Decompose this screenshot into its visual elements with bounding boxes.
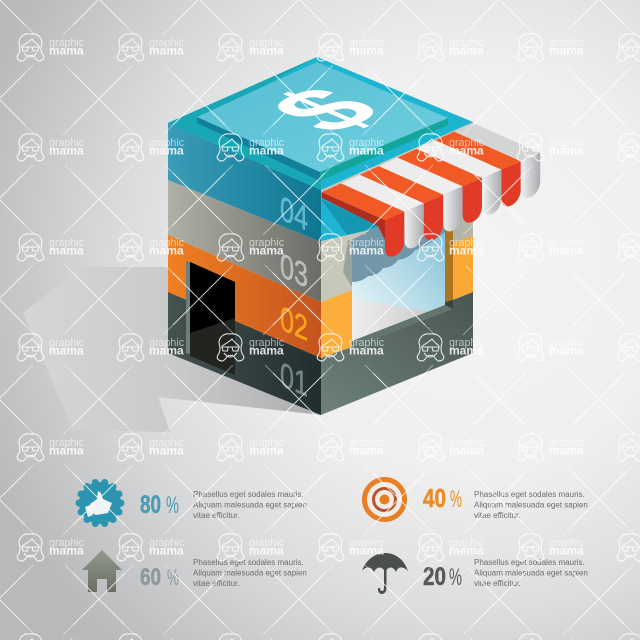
text block: Phasellus eget sodales mauris.	[193, 490, 304, 499]
value: 80 %: %	[166, 492, 179, 519]
text block: Phasellus eget sodales mauris.	[474, 490, 585, 499]
striped awning	[322, 123, 540, 257]
stat: 60 percent	[82, 550, 307, 592]
value: 40 %: %	[450, 486, 462, 513]
text block: vitae efficitur.	[474, 511, 521, 520]
cyan wall under awning	[321, 192, 390, 241]
text block: Aliquam malesuada eget sapien	[193, 568, 307, 578]
awning shadow on the wall	[343, 240, 352, 287]
roof slab	[168, 57, 473, 190]
text block: Aliquam malesuada eget sapien	[474, 568, 588, 578]
number 04: 04	[280, 188, 308, 239]
text block: Phasellus eget sodales mauris.	[474, 558, 585, 567]
value: 20 %: %	[449, 564, 462, 591]
stat: 40 percent	[364, 480, 588, 520]
icon: house	[82, 550, 122, 592]
storey numbers	[280, 188, 308, 405]
stat: 20 percent	[362, 553, 588, 594]
number 01: 01	[280, 354, 308, 405]
number 03: 03	[280, 245, 308, 296]
door	[186, 261, 235, 375]
shop window	[352, 222, 445, 341]
dollar sign: $	[242, 75, 408, 145]
right wall	[321, 122, 473, 415]
number 02: 02	[280, 298, 308, 349]
left wall bands	[168, 123, 321, 415]
icon: thumbs-up badge	[76, 479, 124, 527]
value: 80 %: 80	[140, 491, 161, 519]
text block: Phasellus eget sodales mauris.	[193, 558, 304, 567]
cast shadow of the shop	[23, 267, 321, 432]
value: 40 %: 40	[423, 483, 446, 513]
stat: 80 percent	[76, 479, 307, 527]
text block: vitae efficitur.	[193, 579, 240, 588]
icon: target	[364, 480, 404, 520]
value: 60 %	[140, 564, 179, 591]
lower wall	[321, 292, 473, 415]
text block: vitae efficitur.	[193, 511, 240, 520]
text block: Aliquam malesuada eget sapien	[193, 500, 307, 510]
text block: vitae efficitur.	[474, 579, 521, 588]
isometric shop building	[168, 57, 540, 415]
value: 60 %: 60	[140, 564, 161, 591]
value: 20 %: 20	[423, 563, 446, 591]
text block: Aliquam malesuada eget sapien	[474, 500, 588, 510]
value: 60 %: %	[167, 564, 179, 590]
icon: umbrella	[362, 553, 408, 594]
